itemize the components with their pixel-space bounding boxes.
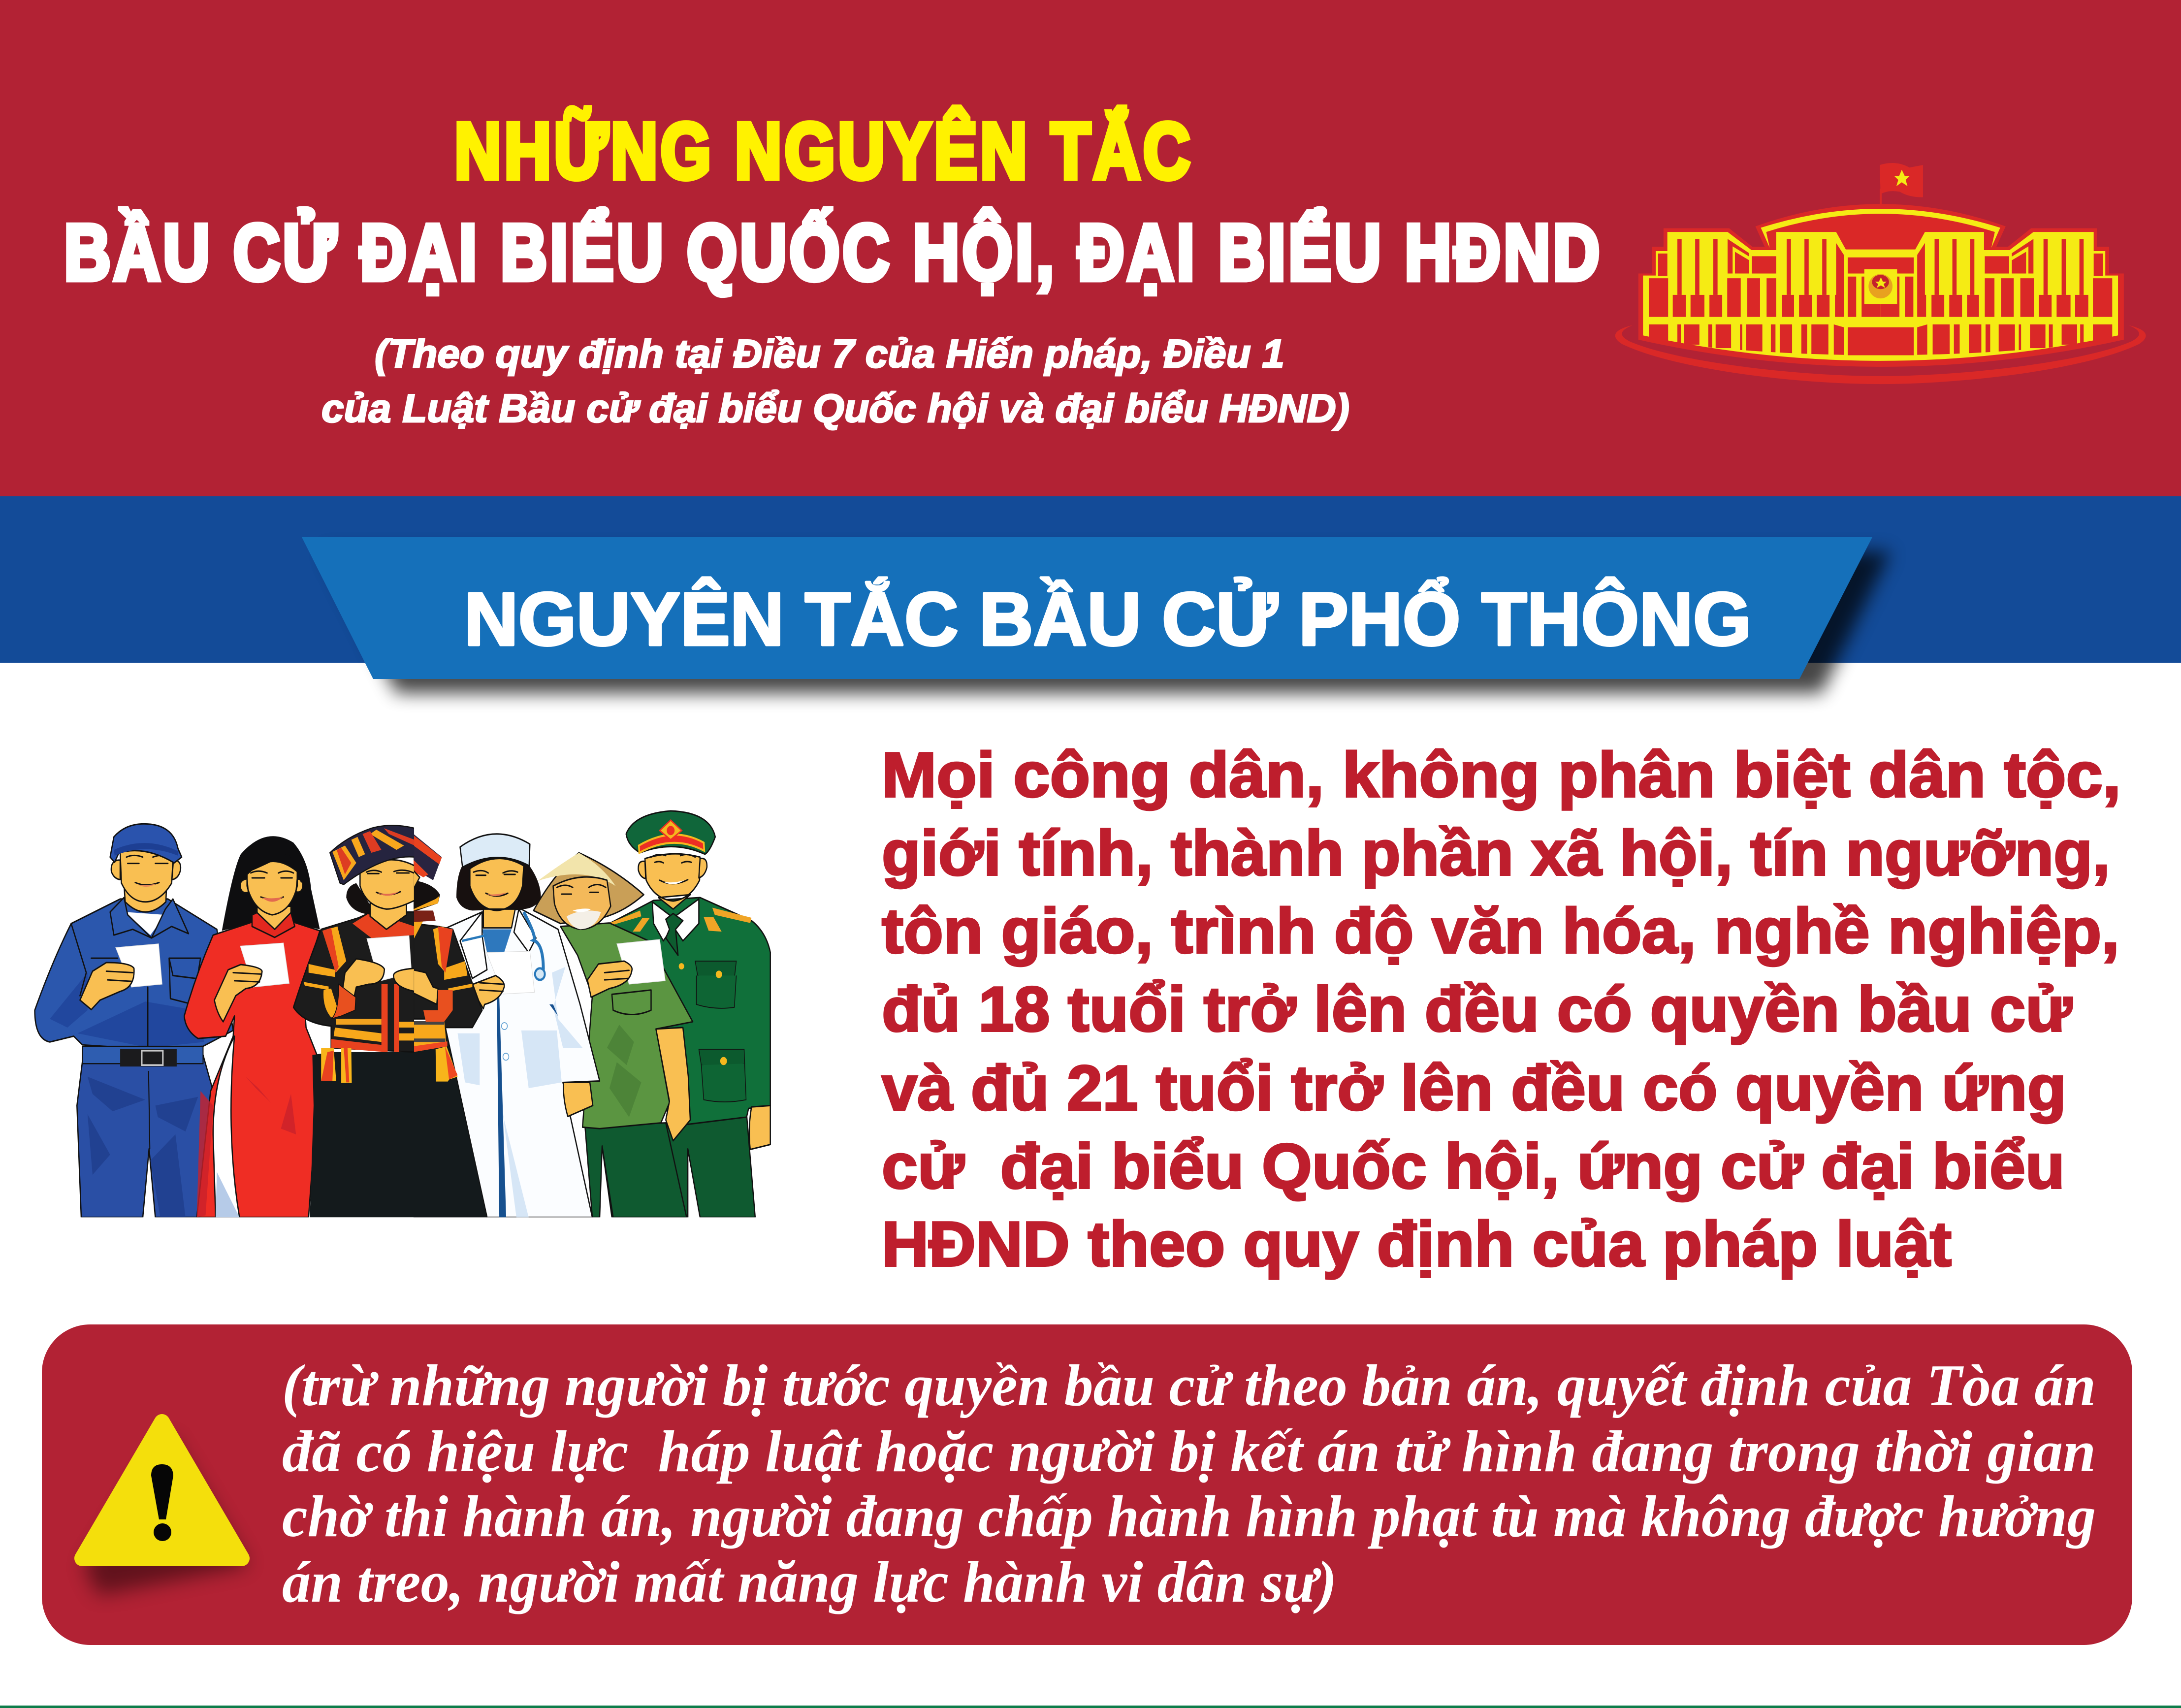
dome <box>1761 209 2000 248</box>
warning text: chờ thi hành án, người đang chấp hành hình phạt tù mà không được hưởng <box>282 1483 2096 1549</box>
windows <box>1649 239 2112 358</box>
ballot 4 <box>486 951 535 994</box>
header background <box>0 0 2181 496</box>
body text: Mọi công dân, không phân biệt dân tộc, <box>882 740 2121 810</box>
heading text: NGUYÊN TẮC BẦU CỬ PHỔ THÔNG <box>464 577 1751 661</box>
warning panel <box>42 1324 2132 1645</box>
warning text: án treo, người mất năng lực hành vi dân sự) <box>282 1549 1337 1614</box>
icon: flag <box>1880 163 1923 206</box>
subtitle: của Luật Bầu cử đại biểu Quốc hội và đại biểu HĐND) <box>321 387 1349 431</box>
title <box>64 107 1603 297</box>
worker <box>35 824 233 1217</box>
ballot 2 <box>240 943 289 987</box>
banner shadow <box>325 551 1891 693</box>
bottom line <box>0 1706 2181 1708</box>
icon: national assembly building <box>1615 163 2146 384</box>
body text: giới tính, thành phần xã hội, tín ngưỡng, <box>882 818 2110 889</box>
title line 2: BẦU CỬ ĐẠI BIỂU QUỐC HỘI, ĐẠI BIỂU HĐND <box>64 208 1603 297</box>
warning text <box>282 1353 2096 1614</box>
warning text: (trừ những người bị tước quyền bầu cử theo bản án, quyết định của Tòa án <box>282 1353 2096 1418</box>
body text: đủ 18 tuổi trở lên đều có quyền bầu cử <box>882 974 2073 1045</box>
ballot 3 <box>367 935 412 981</box>
building outline <box>1638 204 2124 367</box>
body text: tôn giáo, trình độ văn hóa, nghề nghiệp, <box>882 896 2119 967</box>
person: soldier and farmer and nurse <box>413 811 770 1217</box>
body text: HĐND theo quy định của pháp luật <box>882 1209 1952 1280</box>
ethnic woman right part <box>413 834 487 1217</box>
warning text: đã có hiệu lực háp luật hoặc người bị kết án tử hình đang trong thời gian <box>282 1418 2096 1484</box>
swoosh <box>1615 325 2146 384</box>
subtitle: (Theo quy định tại Điều 7 của Hiến pháp, Điều 1 <box>375 332 1284 376</box>
heading banner <box>302 537 1872 679</box>
farmer <box>534 853 693 1217</box>
title line 1: NHỮNG NGUYÊN TẮC <box>454 107 1193 195</box>
person: worker, ao dai woman, ethnic woman <box>35 824 415 1217</box>
subtitle <box>321 332 1349 431</box>
illustration: voters holding ballots <box>35 811 770 1217</box>
soldier hand <box>749 1105 770 1150</box>
facade <box>1643 232 2118 361</box>
ballot 5 <box>617 939 665 984</box>
blue band <box>0 496 2181 663</box>
body text <box>882 740 2121 1280</box>
body text: cử đại biểu Quốc hội, ứng cử đại biểu <box>882 1131 2065 1202</box>
icon: warning triangle <box>82 1422 249 1595</box>
ao dai woman <box>184 836 320 1217</box>
soldier <box>600 811 770 1217</box>
nurse <box>446 834 600 1217</box>
icon: emblem <box>1868 274 1892 298</box>
ballot 1 <box>116 944 162 987</box>
body text: và đủ 21 tuổi trở lên đều có quyền ứng <box>882 1053 2066 1124</box>
ethnic woman left part <box>293 825 415 1217</box>
